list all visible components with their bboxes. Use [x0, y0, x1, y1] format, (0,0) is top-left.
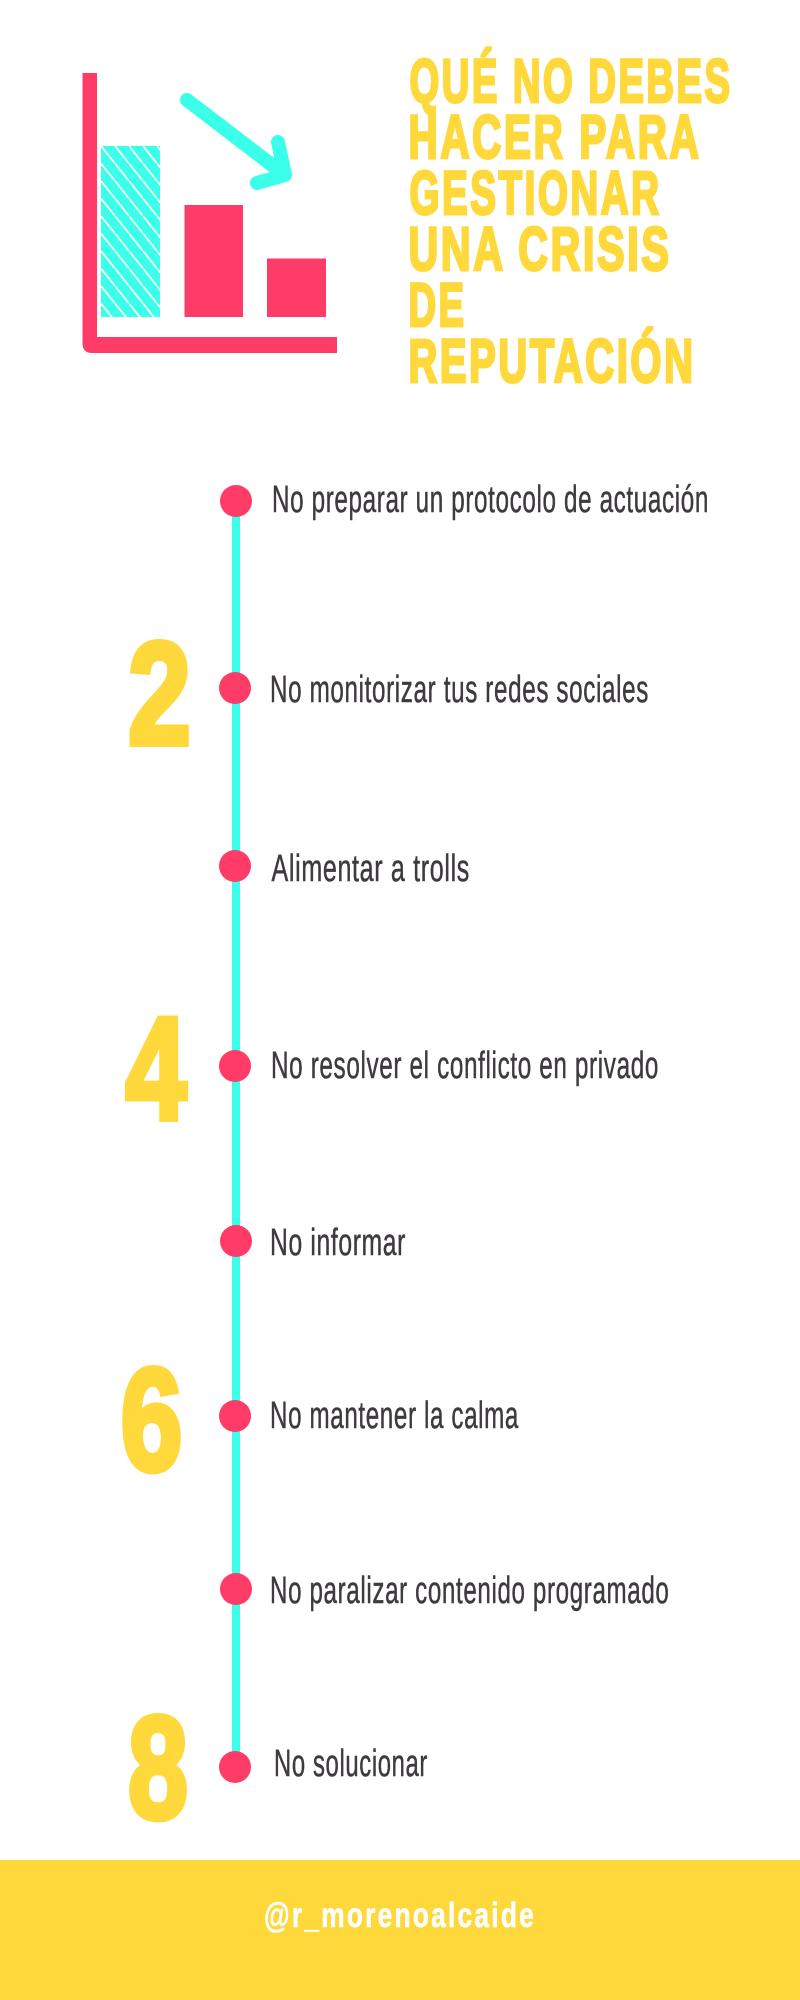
- title: DE: [408, 271, 466, 339]
- title: GESTIONAR: [410, 159, 662, 227]
- number 6: 6: [120, 1338, 182, 1501]
- middle bar: [184, 205, 243, 317]
- step 4: [219, 1045, 659, 1087]
- step 3: Alimentar a trolls: [272, 848, 470, 890]
- number 2: 2: [128, 612, 191, 775]
- step 2: [219, 669, 649, 711]
- step 6: No mantener la calma: [270, 1395, 519, 1437]
- step 7: [220, 1570, 670, 1612]
- step 5: [220, 1222, 406, 1264]
- footer band: [0, 1860, 800, 2000]
- number 4: 4: [126, 987, 186, 1150]
- title: UNA CRISIS: [408, 215, 672, 283]
- step 8: [219, 1743, 428, 1785]
- chart axes: [82, 73, 337, 353]
- downward arrow: [187, 100, 285, 183]
- number 8: 8: [128, 1686, 188, 1849]
- step 6: [219, 1395, 519, 1437]
- hatched bar: [101, 146, 160, 317]
- title: [408, 47, 732, 395]
- step 3: [219, 848, 470, 890]
- short bar: [267, 258, 326, 317]
- step 8: No solucionar: [274, 1743, 428, 1785]
- footer handle: @r_morenoalcaide: [264, 1896, 536, 1935]
- timeline line: [232, 501, 240, 1767]
- icon: falling bar chart: [82, 73, 337, 353]
- step 5: No informar: [270, 1222, 406, 1264]
